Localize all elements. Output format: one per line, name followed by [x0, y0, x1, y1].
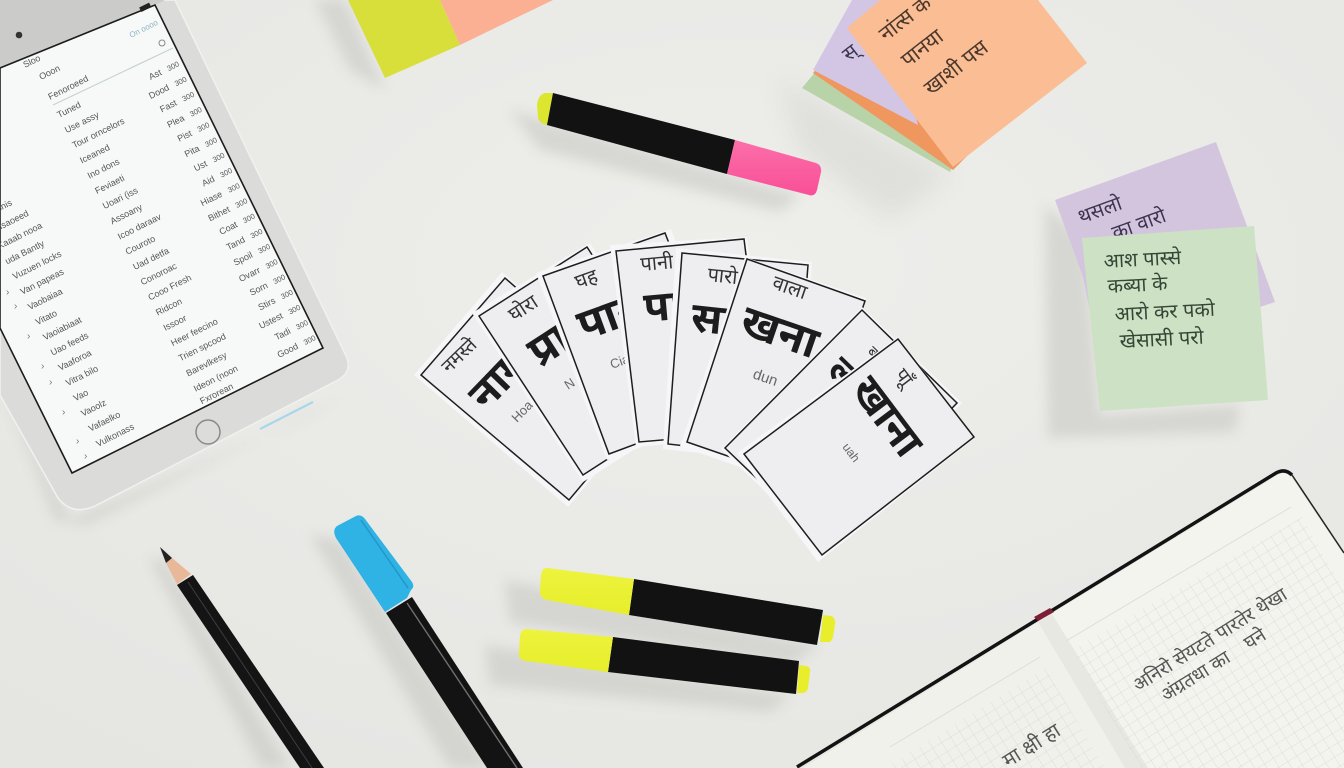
- word list middle column: Fxrorean: [198, 381, 235, 406]
- word list right column: Bithet: [206, 204, 232, 223]
- purple note: [1055, 142, 1275, 360]
- yellow tab: [348, 0, 460, 78]
- card 3: [536, 229, 739, 460]
- header labels: Sloo: [21, 53, 42, 70]
- sticky notes right: [1055, 142, 1275, 411]
- word list middle column: Ino dons: [86, 156, 122, 181]
- word list right column: 300: [234, 196, 249, 210]
- green note text: कब्या के: [1107, 271, 1169, 298]
- word list left column: Vaaforoa: [57, 348, 93, 373]
- word list left column: Vuzuen locks: [11, 249, 64, 281]
- card 2: प्रा: [519, 313, 580, 376]
- peach note text: [874, 0, 993, 100]
- blue cap: [334, 515, 413, 612]
- pencil: [160, 547, 324, 768]
- card 6: dun: [751, 366, 780, 390]
- list chevrons: ›: [76, 436, 79, 447]
- header circle: [159, 40, 165, 46]
- word list right column: 300: [196, 120, 211, 134]
- left page: [803, 622, 1125, 768]
- purple note text: [1075, 190, 1170, 245]
- word list right column: Pist: [176, 128, 194, 144]
- card 8: uah: [840, 440, 863, 465]
- word list right column: Pita: [183, 143, 201, 159]
- word list left column: Vaobaiaa: [26, 286, 64, 312]
- card 8: [737, 337, 975, 562]
- green note text: [1103, 245, 1216, 353]
- tablet top bezel: [0, 0, 165, 68]
- purple note text: का वारो: [1109, 203, 1170, 245]
- card 4: [610, 237, 775, 447]
- right page text: अनिरो सेयटते पारतेर थेखा: [1128, 582, 1292, 696]
- status battery: [139, 3, 151, 12]
- tablet camera: [16, 32, 22, 38]
- word list right column: 300: [294, 318, 310, 332]
- list chevrons: [6, 287, 87, 462]
- word list middle column: Assoany: [109, 202, 144, 226]
- word list middle column: Ideon (noon: [192, 363, 239, 394]
- word list middle column: Uad detfa: [131, 246, 171, 272]
- card 2: घोरा: [504, 289, 543, 326]
- sticky note stack: [802, 0, 1087, 172]
- word list right column: Sorn: [248, 280, 269, 298]
- right page: [1038, 473, 1344, 768]
- word list right column: Stirs: [256, 295, 277, 312]
- word list middle column: Uoari (iss: [101, 185, 140, 211]
- word list middle column: Feviaeti: [93, 173, 126, 196]
- highlighter upper yellow: [540, 568, 835, 645]
- cover right edge: [1292, 475, 1344, 553]
- flashcard fan: [414, 229, 975, 562]
- word list middle column: Iceaned: [78, 142, 111, 165]
- card 8: खाना: [843, 367, 933, 466]
- word list right column: Ust: [192, 158, 209, 173]
- green layer: [802, 30, 955, 172]
- word list left column: Vao: [72, 387, 90, 403]
- card 1: नमस्ते: [436, 332, 482, 378]
- yellow tip: [537, 93, 553, 125]
- peach tab: [440, 0, 553, 45]
- word list left column: Uao feeds: [49, 330, 91, 358]
- card 7: ब: [863, 344, 882, 363]
- word list right column: [136, 58, 317, 361]
- word list middle column: Conoroac: [139, 261, 179, 287]
- right page grid: [1072, 517, 1344, 768]
- word list middle column: Heer feecino: [169, 316, 219, 348]
- header link: On oooo: [128, 18, 160, 40]
- word list right column: 300: [203, 135, 219, 149]
- word list right column: Coat: [218, 219, 240, 237]
- word list middle column: Issoor: [162, 313, 188, 333]
- black barrel: [547, 93, 735, 174]
- list chevrons: ›: [14, 301, 17, 312]
- header labels: [21, 48, 173, 105]
- purple layer: [813, 0, 918, 125]
- green note text: आरो कर पको: [1114, 297, 1216, 326]
- card 6: वाला: [769, 272, 810, 304]
- word list middle column: Use assy: [63, 109, 101, 135]
- graphite point: [160, 547, 172, 563]
- word list middle column: Tuned: [55, 100, 82, 120]
- tablet screen: [0, 5, 323, 473]
- word list left column: Van papeas: [19, 266, 66, 297]
- card 5: पारो: [706, 262, 740, 289]
- yellow cap: [540, 568, 634, 615]
- card 7: ल: [820, 348, 869, 397]
- highlighter lower yellow: [519, 629, 810, 694]
- list chevrons: ›: [27, 331, 30, 342]
- orange layer: [813, 30, 968, 170]
- header labels: Fenoroeed: [46, 73, 90, 102]
- card 1: Hoa: [508, 397, 536, 425]
- list chevrons: ›: [84, 451, 87, 462]
- word list middle column: Cooo Fresh: [146, 272, 193, 302]
- word list right column: 300: [249, 227, 264, 240]
- black cover edge: [797, 471, 1292, 767]
- word list left column: uda Bantly: [3, 238, 46, 266]
- list chevrons: ›: [49, 377, 52, 388]
- word list right column: 300: [241, 212, 257, 225]
- word list right column: 300: [181, 90, 196, 103]
- card 1: [414, 272, 654, 507]
- card 3: Ciao: [608, 349, 638, 372]
- highlighter pink: [537, 93, 821, 195]
- purple note text: स्: [839, 38, 866, 67]
- word list middle column: Barevlkesy: [184, 350, 229, 378]
- green note text: खेसासी परो: [1119, 325, 1205, 353]
- word list right column: Tand: [225, 235, 247, 252]
- word list right column: 300: [211, 151, 226, 164]
- word list right column: 300: [188, 105, 203, 119]
- spine shadow: [1038, 614, 1148, 768]
- yellow end tip: [797, 665, 810, 693]
- word list right column: 300: [165, 59, 181, 73]
- word list left column: Vafaelko: [87, 409, 122, 434]
- list chevrons: ›: [6, 287, 9, 298]
- card 2: [472, 243, 695, 482]
- card 3: पान: [571, 281, 651, 350]
- pencil highlight: [188, 582, 312, 768]
- card 2: N: [561, 375, 578, 393]
- green note text: आश पास्से: [1103, 245, 1182, 273]
- word list middle column: Couroto: [124, 233, 157, 257]
- card 4: पानी: [642, 277, 722, 331]
- wood tip: [166, 558, 191, 584]
- word list middle column: Icoo daraav: [116, 211, 163, 242]
- word list right column: 300: [279, 288, 294, 301]
- card 5: [663, 248, 812, 464]
- body highlight: [407, 603, 517, 768]
- card 1: नाम: [459, 338, 538, 418]
- word list right column: 300: [287, 303, 302, 316]
- word list right column: Hiase: [199, 189, 224, 208]
- word list left column: [0, 188, 147, 449]
- cap clip: [361, 520, 408, 588]
- word list middle column: [55, 85, 254, 406]
- peach note: [847, 0, 1087, 167]
- word list left column: Vitra bilo: [64, 363, 100, 388]
- black barrel: [608, 637, 799, 694]
- word list right column: Aid: [200, 174, 216, 188]
- purple note text: थसलो: [1075, 190, 1126, 229]
- card 7: [721, 307, 962, 546]
- list chevrons: ›: [62, 407, 65, 418]
- word list right column: Tadi: [273, 326, 292, 342]
- card 8: पाूँ: [889, 364, 920, 393]
- word list middle column: Trien spcood: [177, 331, 228, 363]
- word list right column: Fast: [158, 97, 179, 114]
- red ribbon: [1034, 608, 1054, 621]
- word list left column: Vitato: [34, 308, 59, 327]
- tablet body: [0, 0, 348, 510]
- right page text: घने: [1239, 623, 1271, 654]
- sticky tabs top: [348, 0, 553, 78]
- word list right column: Good: [276, 341, 300, 360]
- right page text: अंग्रतधा का: [1158, 647, 1235, 706]
- word list right column: 300: [256, 242, 272, 256]
- pencil body: [177, 575, 324, 768]
- tablet: [0, 0, 348, 510]
- word list right column: 300: [302, 333, 317, 347]
- header labels: Ooon: [37, 63, 62, 82]
- word list right column: Ustest: [257, 310, 285, 331]
- peach note text: पानया: [897, 25, 948, 72]
- word list left column: Vaoiabiaat: [41, 314, 84, 342]
- word list right column: 300: [173, 75, 188, 88]
- peach note text: खाशी पस: [919, 35, 993, 100]
- yellow cap: [519, 629, 613, 672]
- left page rule: [890, 657, 1040, 747]
- word list right column: Dood: [147, 82, 171, 101]
- word list right column: 300: [219, 166, 234, 180]
- blue reflection: [260, 402, 313, 429]
- word list right column: Plea: [165, 113, 186, 130]
- black barrel: [629, 579, 823, 645]
- pink cap: [727, 140, 821, 195]
- word list right column: Spoil: [232, 250, 254, 268]
- word list left column: Vulkonass: [94, 421, 136, 449]
- word list right column: Ast: [147, 67, 164, 82]
- word list right column: 300: [226, 181, 241, 195]
- card 3: घह: [572, 265, 601, 294]
- word list middle column: Tour orncelors: [71, 116, 127, 150]
- yellow end tip: [820, 615, 835, 642]
- notebook: [797, 471, 1344, 768]
- card 6: खना: [735, 296, 826, 368]
- word list right column: 300: [272, 272, 287, 286]
- card 5: सब: [689, 293, 752, 346]
- word list right column: 300: [264, 257, 279, 271]
- word list middle column: Ridcon: [154, 296, 184, 318]
- word list left column: Vaoolz: [79, 397, 108, 418]
- card 6: [680, 257, 866, 490]
- black body: [386, 597, 523, 768]
- card 4: पानी: [639, 249, 675, 276]
- right page rule: [1066, 507, 1291, 641]
- word list right column: Ovarr: [237, 265, 262, 284]
- green note: [1082, 226, 1268, 411]
- home button: [196, 420, 220, 444]
- left page grid: [885, 668, 1105, 768]
- blue marker: [334, 515, 523, 768]
- list chevrons: ›: [41, 361, 44, 372]
